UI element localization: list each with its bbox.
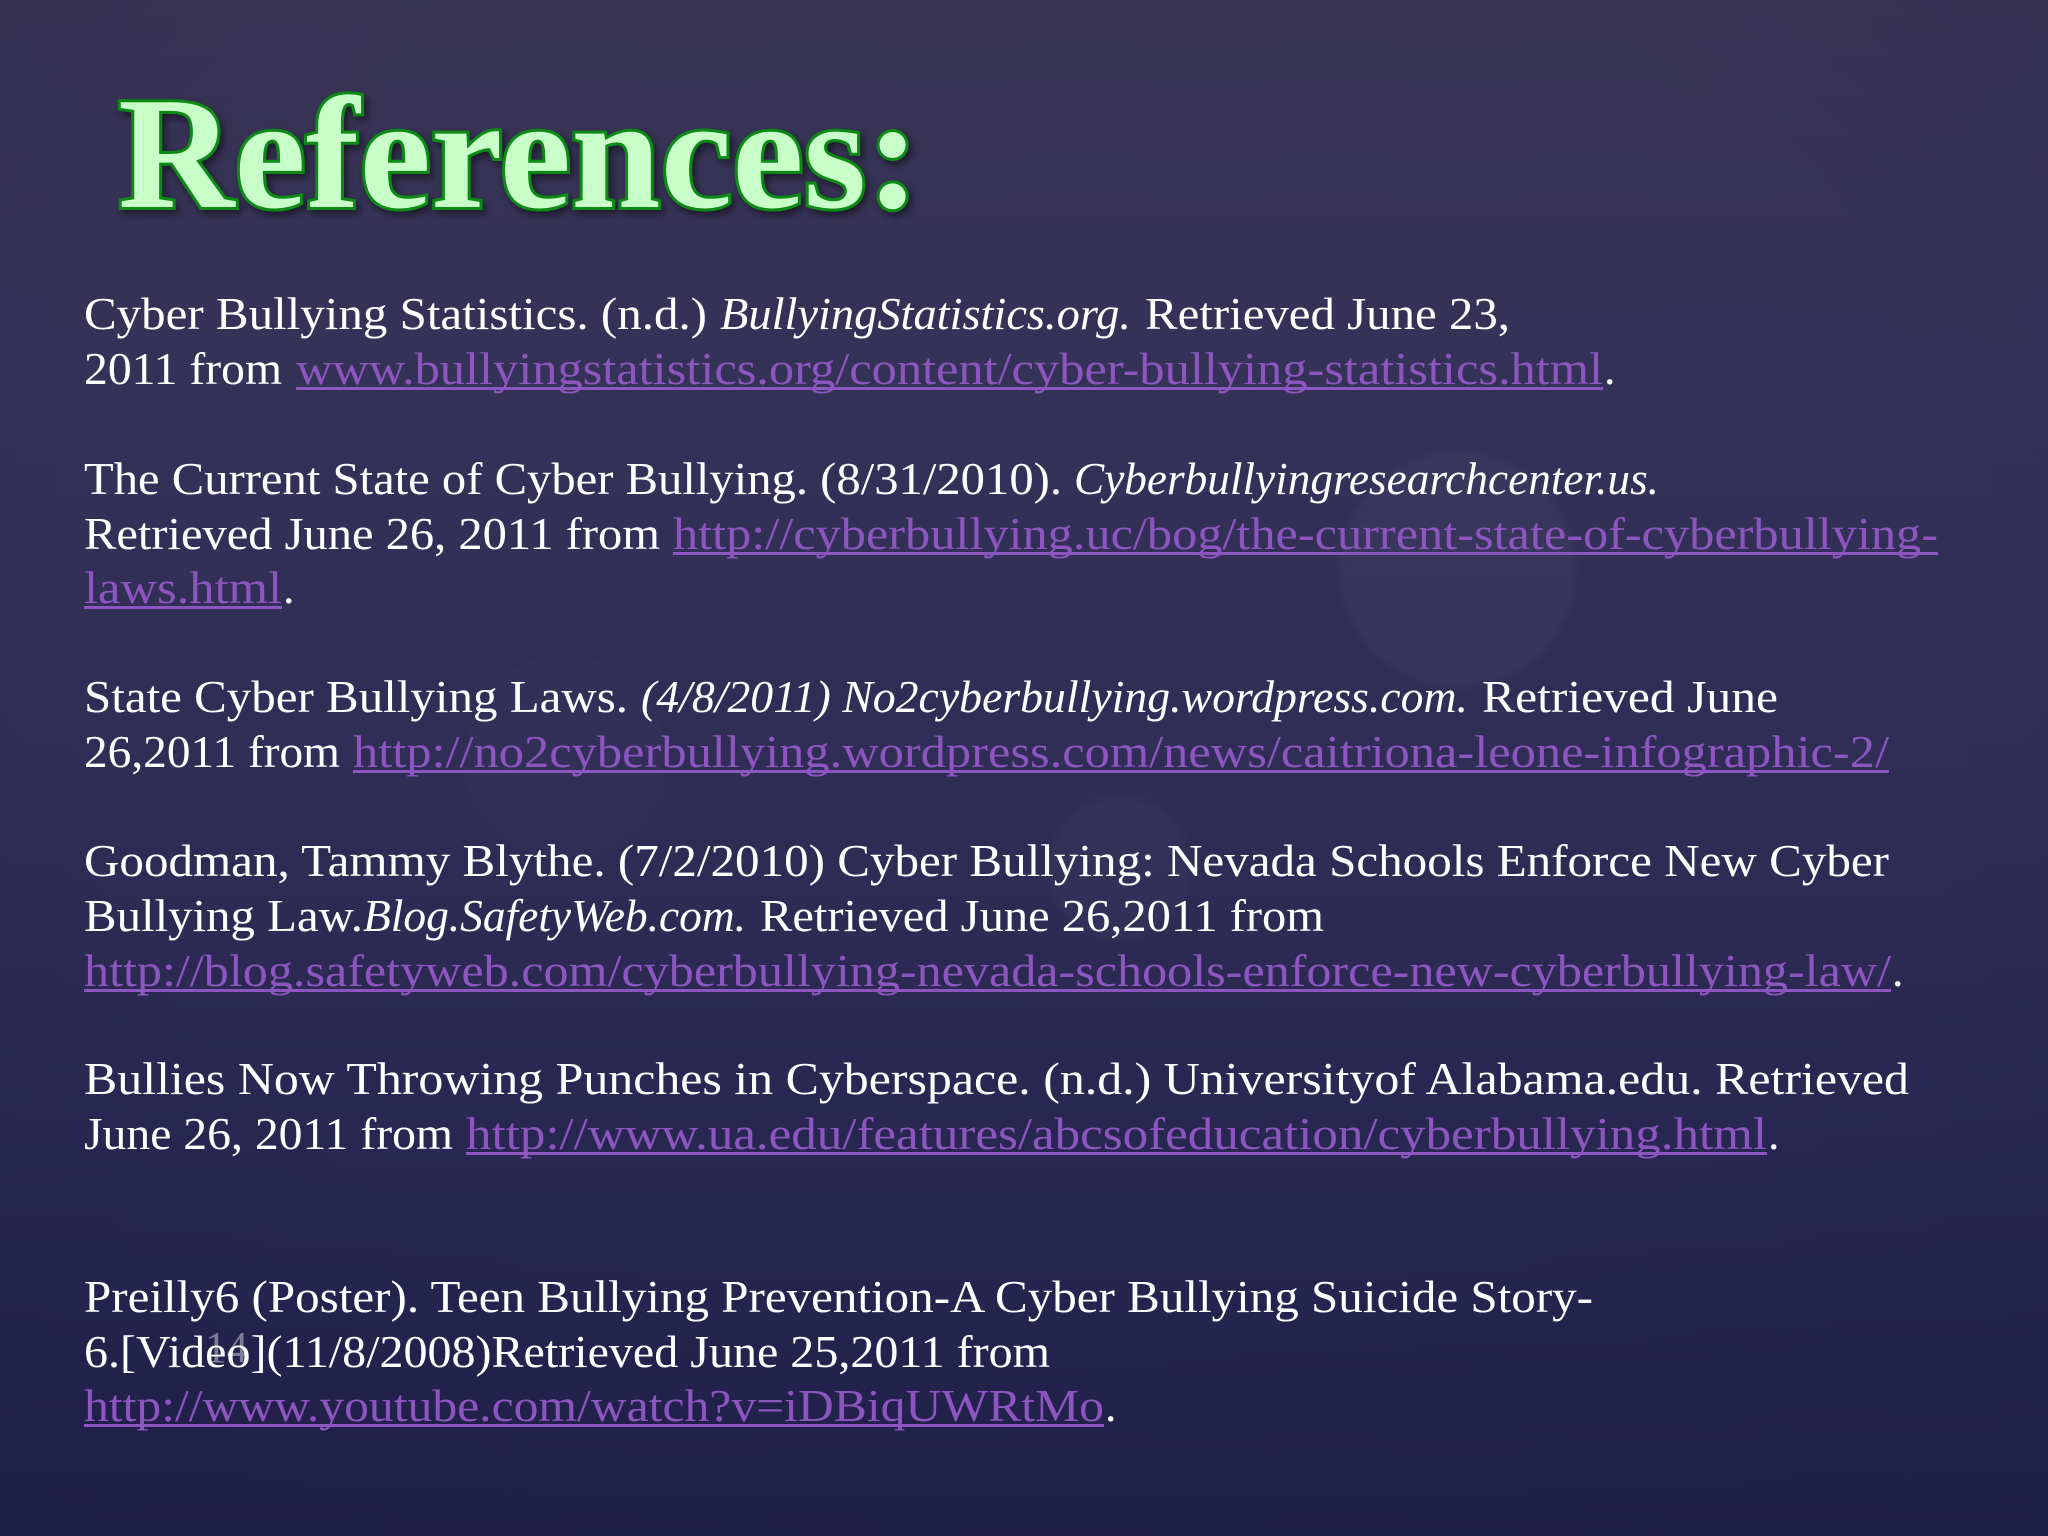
- reference 6: [84, 1271, 1593, 1431]
- reference 2: [84, 453, 1938, 613]
- reference 6: http://www.youtube.com/watch?v=iDBiqUWRtMo: [84, 1380, 1104, 1431]
- reference 2: Cyberbullyingresearchcenter.us.: [1074, 453, 1659, 504]
- reference 4: Retrieved June 26,2011 from: [760, 890, 1324, 941]
- reference 2: Retrieved June 26, 2011 from: [84, 508, 660, 559]
- reference 3: State Cyber Bullying Laws.: [84, 671, 628, 722]
- reference 2: The Current State of Cyber Bullying. (8/31/2010).: [84, 453, 1062, 504]
- reference 1: 2011 from: [84, 343, 282, 394]
- reference 4: Blog.SafetyWeb.com.: [363, 890, 746, 941]
- reference 1: Cyber Bullying Statistics. (n.d.): [84, 288, 707, 339]
- reference 6: Preilly6 (Poster). Teen Bullying Prevention-A Cyber Bullying Suicide Story-: [84, 1271, 1593, 1322]
- reference 1: [84, 288, 1616, 394]
- reference 1: BullyingStatistics.org.: [720, 288, 1131, 339]
- reference 3: 26,2011 from: [84, 726, 340, 777]
- reference 6: .: [1105, 1380, 1116, 1431]
- reference 5: http://www.ua.edu/features/abcsofeducation/cyberbullying.html: [466, 1108, 1767, 1159]
- reference 4: Goodman, Tammy Blythe. (7/2/2010) Cyber Bullying: Nevada Schools Enforce New Cyber: [84, 835, 1889, 886]
- reference 1: Retrieved June 23,: [1145, 288, 1510, 339]
- reference 3: [84, 671, 1889, 777]
- reference 5: Bullies Now Throwing Punches in Cyberspace. (n.d.) Universityof Alabama.edu. Retrieved: [84, 1053, 1909, 1104]
- page number: 14: [205, 1323, 248, 1372]
- reference 3: Retrieved June: [1482, 671, 1778, 722]
- reference 3: (4/8/2011) No2cyberbullying.wordpress.com.: [641, 671, 1468, 722]
- reference 4: http://blog.safetyweb.com/cyberbullying-nevada-schools-enforce-new-cyberbullying-law/: [84, 945, 1891, 996]
- reference 4: .: [1892, 945, 1904, 996]
- reference 5: .: [1768, 1108, 1780, 1159]
- reference 4: [84, 835, 1904, 996]
- reference 6: 6.[Video](11/8/2008)Retrieved June 25,2011 from: [84, 1326, 1050, 1377]
- reference 1: www.bullyingstatistics.org/content/cyber-bullying-statistics.html: [296, 343, 1603, 394]
- reference 2: laws.html: [84, 562, 282, 613]
- reference 2: .: [283, 562, 294, 613]
- reference 3: http://no2cyberbullying.wordpress.com/news/caitriona-leone-infographic-2/: [353, 726, 1889, 777]
- title: References:: [118, 64, 920, 242]
- reference 5: [84, 1053, 1909, 1159]
- reference 1: .: [1604, 343, 1616, 394]
- reference 5: June 26, 2011 from: [84, 1108, 453, 1159]
- reference 4: Bullying Law.: [84, 890, 363, 941]
- reference 2: http://cyberbullying.uc/bog/the-current-state-of-cyberbullying-: [673, 508, 1938, 559]
